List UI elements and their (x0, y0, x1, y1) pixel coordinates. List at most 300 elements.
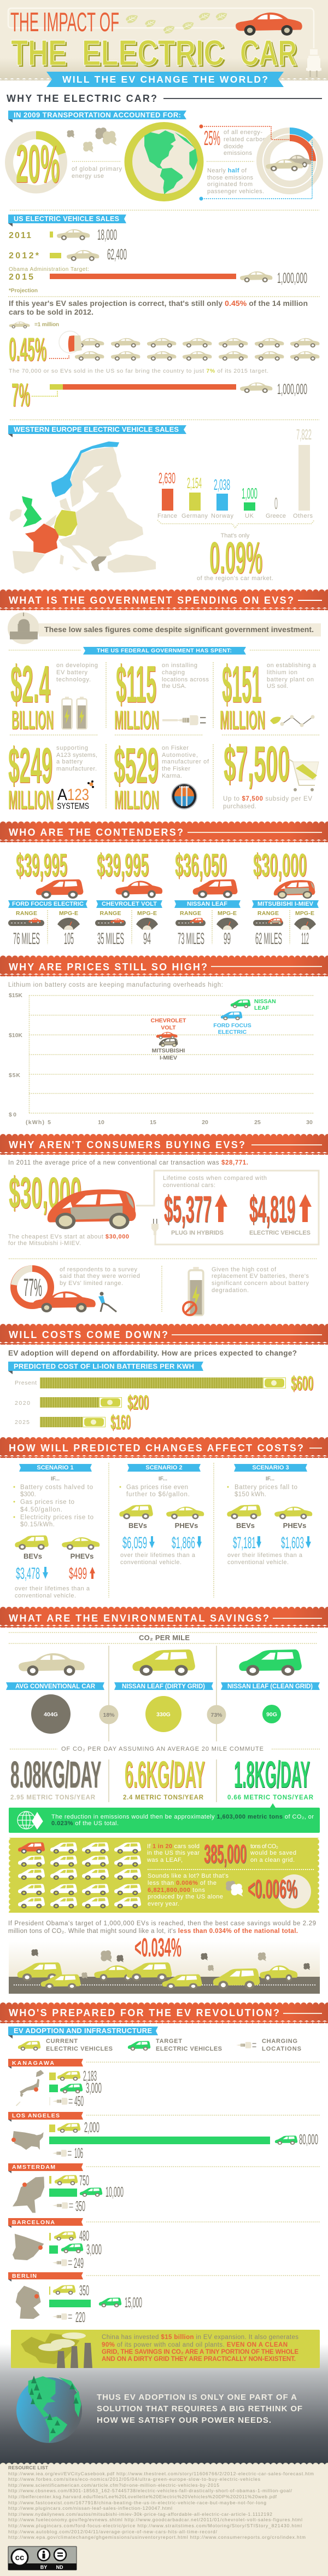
callout: 0.09 percent: That's only (221, 532, 250, 539)
scenario 1: $300. (20, 1491, 36, 1498)
scenario 2: SCENARIO 2 (145, 1464, 183, 1471)
scenario 2: BEVs (128, 1521, 147, 1530)
map: germany (16, 2286, 41, 2319)
text: one in twenty (147, 1840, 296, 1869)
stat: 151 million lithium: on establishing a (267, 662, 317, 669)
ribbon: western europe: WESTERN EUROPE ELECTRIC VEHICLE SALES (14, 425, 179, 433)
title: the electric car: THE (11, 32, 67, 73)
text: one in twenty: on a clean grid. (250, 1857, 295, 1863)
chart: cost versus kwh: 30 (306, 1119, 313, 1126)
stat: 6.6 kg per day: 2.4 METRIC TONS/YEAR (123, 1794, 204, 1801)
bar chart: sales by country: 2,154 (187, 474, 202, 491)
point: ford focus (213, 1011, 251, 1035)
stat: 529 million fisker: $529 (114, 738, 159, 794)
callout: 25 percent: emissions (224, 150, 253, 157)
ribbon: 2009 transportation: IN 2009 TRANSPORTATION ACCOUNTED FOR: (14, 111, 181, 119)
list: source urls (8, 2471, 314, 2540)
icon: capitol (8, 612, 39, 644)
connectors: dotted callout lines (199, 125, 312, 200)
panel: china (11, 2330, 320, 2368)
scenario 1 (13, 1464, 99, 1599)
stat: 2.4 billion batteries (10, 655, 98, 735)
card: nissan leaf: 73 MILES (178, 930, 204, 948)
text: survey respondents: said that they were worried (60, 1273, 140, 1280)
bar chart: sales by country: Greece (266, 513, 286, 519)
section band: environmental savings: WHAT ARE THE ENVIRONMENTAL SAVINGS? (9, 1613, 269, 1624)
card: nissan leaf: 99 (224, 930, 231, 948)
badge: creative commons (8, 2546, 77, 2570)
ribbon: 2009 transportation (8, 111, 186, 123)
logo: a123 systems: A (57, 786, 67, 804)
section band: scenarios: HOW WILL PREDICTED CHANGES AFFECT COSTS? (9, 1443, 303, 1454)
text: low sales figures (39, 623, 321, 636)
map: netherlands (13, 2176, 44, 2213)
bar: 2025 (15, 1411, 131, 1433)
bar chart: sales by country: UK (245, 513, 254, 519)
section band: costs: WILL COSTS COME DOWN? (9, 1329, 168, 1340)
scenario 3: IF... (266, 1476, 274, 1482)
icon: clouds and globe (226, 1874, 311, 1908)
list: source urls: http://www.fueleconomy.gov/feg/evnews.shtml http://www.goodcarbadcar.net/2011/01/chevrolet-volt-sales-figures.html (8, 2517, 302, 2522)
scenario 1: $499 (69, 1565, 87, 1583)
point: mitsubishi: I-MIEV (160, 1055, 177, 1061)
stat: 529 million fisker (114, 738, 209, 815)
stat: 8.08 kg per day: 2.95 METRIC TONS/YEAR (10, 1794, 96, 1801)
card: chevrolet volt: 94 (143, 930, 151, 948)
city: los angeles: 106 (74, 2145, 83, 2161)
chart: cost versus kwh: $0 (9, 1112, 16, 1118)
legend: ELECTRIC VEHICLES (46, 2046, 113, 2052)
panel: us ev sales: 62,400 (107, 246, 127, 263)
text: low sales figures: These low sales figures come despite significant government investment. (44, 625, 314, 634)
title: the electric car: CAR (242, 34, 298, 74)
chart: cost versus kwh: 20 (202, 1119, 208, 1126)
row: 2012 (9, 246, 127, 263)
chart: cost versus kwh: 5 (48, 1119, 51, 1126)
scenario 3: conventional vehicle. (227, 1559, 289, 1566)
text: one in twenty: If 1 in 20 cars sold (147, 1843, 200, 1850)
ribbon: federal government (9, 647, 320, 655)
point: nissan leaf: NISSAN (254, 998, 276, 1005)
card: nissan leaf: $36,050 (175, 847, 227, 883)
stat: 249 million a123: supporting (56, 745, 88, 751)
panel: environmental savings: 8.08KG/DAY (10, 1753, 101, 1796)
heading: co2 per mile: CO₂ PER MILE (139, 1634, 190, 1642)
title: the electric car: ELECTRIC (84, 34, 226, 74)
stat: 115 million charging: $115 (116, 655, 156, 714)
point: ford focus: FORD FOCUS (213, 1022, 251, 1029)
badge: creative commons: BY (40, 2565, 47, 2570)
scenario 1: BEVs (24, 1552, 42, 1560)
logo: fisker: FISKER (179, 786, 190, 789)
card: ford focus electric (8, 847, 87, 948)
cars: back row and front row (17, 1963, 297, 1989)
row: 2011 (9, 227, 117, 243)
stat: 249 million a123: manufacturer. (56, 766, 97, 772)
chart: 77 percent donut (11, 1265, 51, 1306)
callout: 0.09 percent: of the region's car market. (197, 575, 273, 582)
panel: western europe sales (8, 425, 314, 583)
city: kanagawa: KANAGAWA (12, 2060, 54, 2066)
illustration: traffic jam: <0.034% (134, 1934, 181, 1963)
scenario 1: Electricity prices rise to (20, 1514, 93, 1521)
frame: lifetime costs: PLUG IN HYBRIDS (171, 1230, 224, 1236)
text: sounds like a lot (148, 1873, 229, 1907)
pictogram: 14 cars (75, 338, 319, 361)
text: china investment: China has invested $15 billion in EV expansion. It also generates (102, 2334, 298, 2341)
bar chart: sales by country: Germany (181, 513, 208, 519)
city: kanagawa (8, 2059, 320, 2109)
panel: environmental savings: 6.6KG/DAY (125, 1753, 205, 1796)
section band: consumers: WHY AREN'T CONSUMERS BUYING EVS? (9, 1139, 245, 1150)
text: battery degradation: Given the high cost of (212, 1266, 277, 1273)
section band: consumers (0, 1134, 328, 1155)
scenario 2 (119, 1464, 204, 1566)
text: average price: In 2011 the average price of a new conventional car transaction was $28,771. (8, 1160, 248, 1166)
city: berlin: 350 (79, 2282, 89, 2299)
scenario 1: $3,478 (16, 1565, 40, 1583)
scenario 3: PHEVs (283, 1521, 306, 1530)
text: conclusion: THUS EV ADOPTION IS ONLY ONE PART OF A (97, 2393, 297, 2402)
section band: prices: WHY ARE PRICES STILL SO HIGH? (9, 962, 207, 972)
subtitle banner: WILL THE EV CHANGE THE WORLD? (62, 74, 268, 85)
chart: cost versus kwh (9, 992, 314, 1126)
bar: 7 percent of target (32, 381, 307, 397)
text: one in twenty: tons of CO₂ (250, 1843, 278, 1850)
title: the electric car: CAR (240, 32, 297, 73)
card: mitsubishi i-miev: MPG-E (295, 910, 314, 917)
text: adoption sentence: EV adoption will depend on affordability. How are prices expected to change? (8, 1349, 297, 1357)
chart: 20 percent donut (9, 134, 63, 194)
stat: 115 million charging: locations across (162, 676, 209, 683)
callout: half of emissions: those emissions (207, 175, 254, 181)
stat: 7500 subsidy: Up to $7,500 subsidy per EV (223, 796, 312, 802)
list: source urls: http://www.forbes.com/sites/eco-nomics/2012/05/04/ultra-green-europe-slow-to-buy-electric-vehicles (8, 2476, 260, 2482)
icon: globe and recycle (17, 1811, 43, 1829)
text: obama target savings (8, 1920, 316, 1935)
bar chart: sales by country: Others (293, 513, 313, 519)
text: sounds like a lot: every year. (148, 1901, 179, 1907)
list: source urls: http://www.epa.gov/climatechange/ghgemissions/usinventoryreport.html http://www.consumerreports.org/cro/index.htm (8, 2534, 306, 2540)
stat: 529 million fisker: MILLION (114, 786, 159, 815)
scenario 1: conventional vehicle. (15, 1593, 76, 1599)
frame: lifetime costs: $5,377 (164, 1188, 212, 1230)
illustration: traffic jam (9, 1934, 320, 1994)
callout: half of emissions: passenger vehicles. (207, 188, 264, 195)
panel: why the electric car (7, 93, 323, 201)
frame: lifetime costs: ELECTRIC VEHICLES (249, 1230, 311, 1236)
stat: 115 million charging: on installing (162, 662, 197, 669)
bar chart: sales by country: Norway (211, 513, 234, 519)
panel: battery cost chart (8, 982, 314, 1126)
chart: cost versus kwh: 15 (150, 1119, 156, 1126)
callout: half of emissions: originated from (207, 181, 253, 188)
city: barcelona: BARCELONA (12, 2219, 55, 2226)
reductions: percent circles: 73% (210, 1712, 222, 1718)
stat: 115 million charging: the USA. (162, 683, 186, 690)
column: leaf dirty grid: NISSAN LEAF (DIRTY GRID) (122, 1683, 205, 1690)
chart: cost versus kwh: 10 (98, 1119, 104, 1126)
country: uk (22, 496, 42, 527)
panel: predicted battery cost: $160 (110, 1411, 131, 1433)
city: barcelona: 249 (74, 2255, 84, 2271)
ribbon: predicted cost (8, 1362, 203, 1374)
stat: 151 million lithium: battery plant on (267, 676, 314, 683)
scenario 3: Battery prices fall to (235, 1484, 297, 1491)
section band: government spending: WHAT IS THE GOVERNMENT SPENDING ON EVS? (9, 595, 294, 606)
bar chart: sales by country: 2,630 (159, 470, 175, 487)
text: projection sentence: cars to be sold in 2012. (9, 308, 93, 316)
map: spain (13, 2234, 44, 2260)
card: ford focus electric: MPG-E (59, 910, 78, 917)
column: leaf clean grid: NISSAN LEAF (CLEAN GRID) (227, 1683, 313, 1690)
point: mitsubishi (152, 1038, 185, 1061)
scenario 2: Gas prices rise even (126, 1484, 188, 1491)
bar: 2020: 2020 (15, 1400, 30, 1406)
city: los angeles: 2,000 (84, 2119, 99, 2135)
card: mitsubishi i-miev: RANGE (257, 910, 279, 917)
column: conventional car: 404G (44, 1711, 58, 1718)
city: los angeles: LOS ANGELES (12, 2112, 60, 2119)
card: chevrolet volt: CHEVROLET VOLT (102, 901, 157, 907)
section band: who's prepared (0, 2002, 328, 2023)
text: china investment: AND ON A DIRTY GRID THEY ARE PRACTICALLY NON-EXISTENT. (102, 2356, 296, 2363)
city: amsterdam: 10,000 (106, 2184, 124, 2200)
scenario 3: $7,181 (233, 1534, 256, 1552)
ribbon: western europe (8, 425, 186, 437)
bar chart: sales by country: 0 (274, 495, 278, 513)
stat: 2.4 billion batteries: on developing (56, 662, 98, 669)
scenario 3: BEVs (236, 1521, 255, 1530)
ribbon: us sales: US ELECTRIC VEHICLE SALES (14, 215, 119, 223)
panel: scenarios (13, 1463, 312, 1599)
column: conventional car (6, 1653, 104, 1734)
stat: 6.6 kg per day (123, 1753, 205, 1801)
text: global energy: energy use (72, 173, 104, 180)
point: chevrolet volt: VOLT (161, 1024, 176, 1031)
list: source urls: http://www.nydailynews.com/autos/mitsubishi-imiev-30k-price-tag-affordable-all-electric-car-article-1.1112192 (8, 2511, 272, 2517)
ribbon: adoption (8, 2027, 158, 2039)
stat: 529 million fisker: the Fisker (162, 766, 190, 772)
bar chart: sales by country: France (157, 513, 177, 519)
scenario 1: IF... (51, 1476, 60, 1482)
stat: 529 million fisker: Automotive, (162, 752, 198, 759)
legend: CHARGING (262, 2038, 297, 2045)
country: greece (91, 557, 107, 571)
map: europe (9, 442, 156, 574)
point: chevrolet volt (151, 1017, 186, 1039)
city: berlin (8, 2272, 320, 2325)
stat: 2.4 billion batteries: BILLION (11, 706, 54, 735)
text: conclusion: SOLUTION THAT REQUIRES A BIG RETHINK OF (97, 2404, 302, 2413)
panel: us ev sales (8, 215, 320, 413)
map: japan (16, 2070, 44, 2106)
icon: globe with trees (16, 2376, 82, 2443)
frame: lifetime costs (136, 1171, 319, 1244)
text: sounds like a lot: 6,821,800,000 tons (148, 1887, 206, 1894)
card: ford focus electric: 76 MILES (13, 930, 40, 948)
chart: cost versus kwh: 25 (254, 1119, 261, 1126)
city: berlin: 220 (75, 2309, 85, 2325)
text: one in twenty: 385,000 (204, 1840, 247, 1869)
scenario 1: over their lifetimes than a (15, 1585, 90, 1592)
text: china investment (102, 2334, 298, 2363)
text: battery degradation: degradation. (212, 1287, 249, 1294)
stat: 115 million charging: chaging (162, 669, 185, 676)
power cord (8, 8, 314, 48)
callout: 25 percent: related carbon (224, 136, 266, 143)
section band: who's prepared: WHO'S PREPARED FOR THE EV REVOLUTION? (9, 2007, 279, 2018)
list: source urls: http://www.autoblog.com/2012/04/11/average-price-of-new-cars-hits-all-time-record/ (8, 2529, 218, 2534)
text: cheapest evs: for the Mitsubishi i-MIEV. (8, 1240, 81, 1247)
text: global energy: of global primary (72, 166, 122, 172)
card: chevrolet volt: $39,995 (97, 847, 149, 883)
ribbon: predicted cost: PREDICTED COST OF LI-ION BATTERIES PER KWH (14, 1362, 194, 1370)
stat: 7500 subsidy: purchased. (223, 803, 256, 810)
scenario 1: PHEVs (71, 1552, 93, 1560)
scenario 3: $150 kWh. (235, 1491, 266, 1498)
card: chevrolet volt: MPG-E (137, 910, 157, 917)
callout: half of emissions: Nearly half of (207, 167, 247, 174)
ribbon: us sales (8, 215, 126, 227)
background: dark gradient (0, 2344, 328, 2463)
scenario 2: further to $6/gallon. (126, 1491, 190, 1498)
card: mitsubishi i-miev (252, 847, 319, 948)
bar chart: sales by country: 1,000 (242, 485, 257, 502)
callout: 0.09 percent (157, 520, 314, 583)
stat: 151 million lithium: lithium ion (267, 669, 297, 676)
ribbon: adoption: EV ADOPTION AND INFRASTRUCTURE (14, 2027, 152, 2035)
stat: 1.8 kg per day: 0.66 METRIC TONS/YEAR (227, 1794, 314, 1801)
card: chevrolet volt: RANGE (99, 910, 121, 917)
panel: environmental savings (6, 1633, 320, 1994)
card: ford focus electric: FORD FOCUS ELECTRIC (12, 901, 84, 907)
stat: 249 million a123: $249 (8, 738, 52, 794)
panel: us ev sales: 0.45% (9, 331, 46, 368)
subtitle banner (46, 72, 284, 87)
heading: resource list: RESOURCE LIST (8, 2465, 49, 2470)
chart: cost versus kwh: $10K (9, 1032, 22, 1039)
footer: resources (0, 2462, 328, 2576)
column: leaf dirty grid: 330G (156, 1711, 171, 1718)
stat: 249 million a123: MILLION (8, 786, 54, 815)
stat: 151 million lithium (220, 655, 317, 735)
row: 2011: 2011 (9, 231, 31, 240)
city: kanagawa: 2,183 (83, 2068, 97, 2084)
scenario 2: conventional vehicle. (120, 1559, 181, 1566)
scenario 3: SCENARIO 3 (252, 1464, 289, 1471)
city: amsterdam: AMSTERDAM (12, 2164, 55, 2170)
list: source urls: http://belfercenter.ksg.harvard.edu/files/Lee%20Lovellette%20Electric%20Vehicles%20DP%202011%20web.pdf (8, 2494, 277, 2499)
stat: 529 million fisker: on Fisker (162, 745, 189, 751)
city: amsterdam (8, 2163, 320, 2214)
frame: lifetime costs: Lifetime costs when compared with (163, 1175, 267, 1182)
scenario 1: $0.15/kWh. (20, 1521, 55, 1528)
legend: CURRENT (46, 2038, 78, 2045)
callout: 25 percent: dioxide (224, 143, 243, 150)
stat: 249 million a123: a battery (56, 759, 83, 765)
column: leaf dirty grid (114, 1649, 213, 1732)
card: nissan leaf: RANGE (180, 910, 201, 917)
panel: consumers (8, 1160, 319, 1316)
scenario 2: over their lifetimes than a (120, 1552, 196, 1559)
magnifier highlighting car fraction (49, 331, 82, 358)
panel: us ev sales: 18,000 (97, 227, 117, 243)
panel: reduction callout: The reduction in emissions would then be approximately 1,603,000 metric tons of CO₂, or (51, 1814, 314, 1820)
text: cheapest evs: The cheapest EVs start at about $30,000 (8, 1234, 129, 1240)
map: usa (13, 2131, 44, 2150)
title: the electric car (11, 32, 298, 74)
stat: 7500 subsidy (223, 736, 319, 810)
row: 2012: 2012* (9, 251, 39, 261)
stat: 115 million charging (114, 655, 209, 735)
chart: 77 percent donut: 77% (24, 1273, 42, 1301)
card: mitsubishi i-miev: 62 MILES (255, 930, 282, 948)
text: survey respondents: by EVs' limited range. (60, 1280, 123, 1287)
section band: contenders: WHO ARE THE CONTENDERS? (9, 827, 183, 838)
point: mitsubishi: MITSUBISHI (152, 1047, 185, 1054)
header: title area (0, 0, 328, 87)
text: lithium ion intro: Lithium ion battery costs are keeping manufacturing overheads high: (8, 982, 223, 988)
text: china investment: 90% of its power with coal and oil plants. EVEN ON A CLEAN (102, 2342, 288, 2348)
text: one in twenty: was a LEAF, (147, 1857, 183, 1863)
text: cheapest evs (8, 1234, 129, 1247)
card: mitsubishi i-miev: 112 (301, 930, 309, 948)
section band: prices (0, 956, 328, 976)
card: ford focus electric: RANGE (16, 910, 37, 917)
country: germany (54, 510, 78, 536)
country: norway (51, 442, 119, 497)
panel: us ev sales: 7% (11, 377, 30, 413)
text: global energy (72, 161, 122, 180)
section band: environmental savings (0, 1607, 328, 1628)
chart: cost versus kwh: (kWh) (26, 1119, 44, 1126)
scenario 2: $6,059 (122, 1534, 147, 1552)
ribbon: federal government: THE US FEDERAL GOVERNMENT HAS SPENT: (97, 647, 232, 654)
reductions: percent circles: 18% (103, 1712, 115, 1718)
stat: 8.08 kg per day (10, 1753, 101, 1801)
map: china with factories (21, 2332, 92, 2368)
column: leaf clean grid: 90G (266, 1711, 277, 1718)
list: source urls: http://www.plugincars.com/nissan-leaf-sales-inflection-120047.html (8, 2505, 172, 2511)
text: battery degradation: significant concern about battery (212, 1280, 309, 1287)
city: amsterdam: 350 (75, 2198, 85, 2214)
city: barcelona: 480 (79, 2227, 89, 2244)
row: 2015 target: Obama Administration Target: (9, 267, 89, 273)
panel: one in twenty cars (9, 1838, 319, 1913)
stat: 2.4 billion batteries: technology. (56, 676, 91, 683)
panel: government spending (8, 612, 321, 815)
badge: creative commons: cc (15, 2553, 24, 2562)
footnote: *Projection (9, 288, 38, 294)
text: china investment: GRID, THE SAVINGS IN CO₂ ARE A TINY PORTION OF THE WHOLE (102, 2349, 298, 2355)
city: amsterdam: 750 (79, 2172, 89, 2189)
row: 2015 target (9, 267, 307, 286)
title: the electric car: ELECTRIC (82, 32, 224, 73)
heading: WHY THE ELECTRIC CAR? (7, 93, 157, 104)
badge: creative commons: ND (56, 2565, 63, 2570)
city: kanagawa: 450 (74, 2093, 84, 2109)
legend (18, 2038, 301, 2052)
panel: consumers: $30,000 (9, 1168, 81, 1218)
title: the electric car: THE (13, 34, 68, 74)
callout: 25 percent: 25% (204, 127, 220, 149)
text: 7 percent of target: The 70,000 or so EVs sold in the US so far bring the country to just 7% of its 2015 target. (9, 368, 268, 374)
country: france (25, 524, 58, 554)
panel: predicted battery cost: $200 (127, 1391, 149, 1414)
icon: plug (306, 49, 321, 77)
stat: 529 million fisker: manufacturer of (162, 759, 209, 765)
